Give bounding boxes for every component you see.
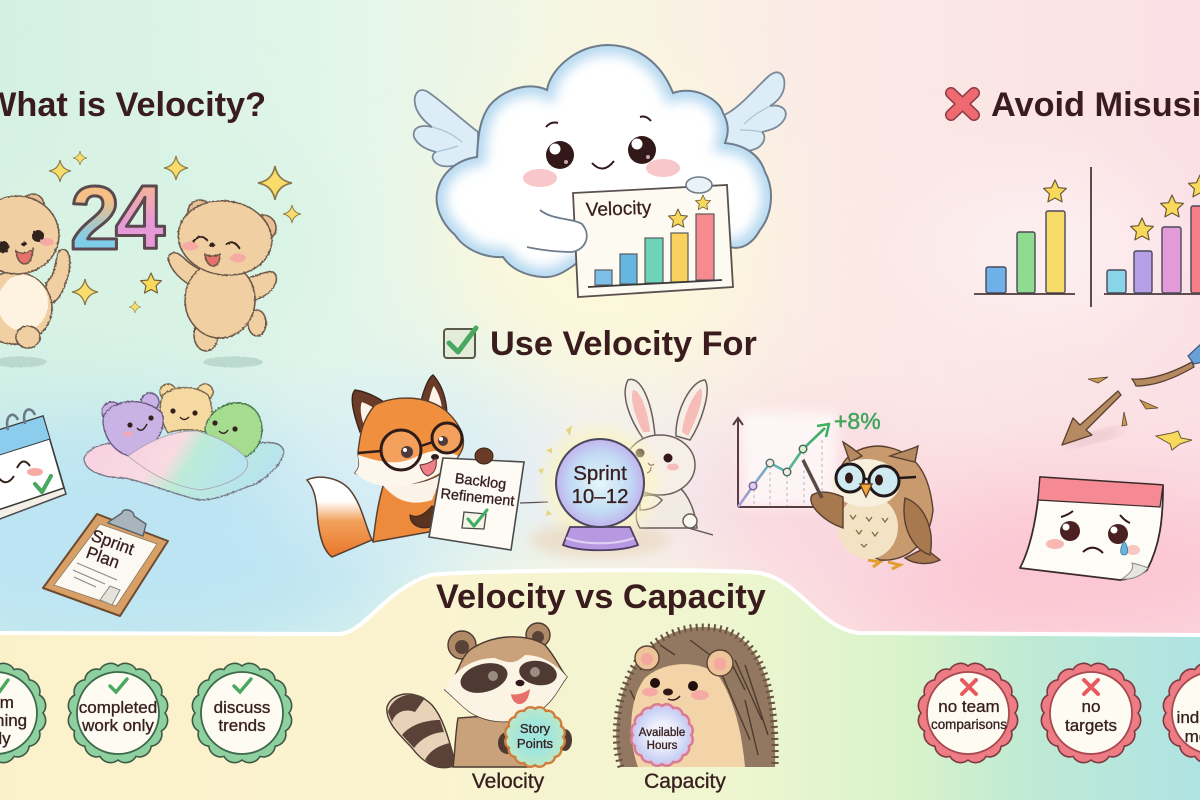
sticker: no team comparisons — [918, 663, 1018, 763]
illustration: sprint plan clipboard: Plan — [84, 543, 122, 572]
fox body — [373, 480, 440, 542]
backlog refinement sheet: Refinement — [440, 486, 515, 510]
number: 24 story points — [70, 168, 165, 269]
sticker: discuss trends: trends — [218, 716, 266, 735]
heading: Velocity vs Capacity: Velocity vs Capacity — [436, 578, 766, 616]
cloud body — [437, 45, 771, 277]
sticker: completed work only — [68, 663, 168, 763]
velocity chart card — [573, 185, 733, 297]
yellow plush — [160, 384, 213, 433]
illustration: owl with pointer — [803, 442, 940, 569]
left team bars — [986, 211, 1065, 293]
sticker: completed work only: work only — [81, 716, 154, 735]
right wing — [724, 72, 786, 152]
hedgehog spines — [616, 627, 775, 767]
label: Velocity: Velocity — [472, 770, 545, 793]
badge: available hours: Available — [639, 727, 685, 739]
fox head — [355, 398, 463, 485]
sparkles around the number — [49, 151, 301, 313]
badge: story points — [505, 707, 565, 767]
sticker: no team comparisons: no team — [938, 697, 1000, 716]
right team bars — [1107, 206, 1200, 293]
illustration: sprint plan clipboard: Sprint — [89, 526, 137, 559]
left wing — [414, 90, 478, 166]
quilt — [84, 437, 284, 500]
mascot: winged cloud with velocity chart — [414, 45, 786, 297]
illustration: crystal ball sprint 10-12 — [534, 417, 666, 550]
illustration: bunny — [625, 379, 707, 528]
hedgehog face — [631, 664, 745, 767]
illustration: fox holding backlog refinement sheet — [307, 375, 524, 557]
illustration: sprint plan clipboard — [43, 510, 168, 616]
sticker: discuss trends: discuss — [214, 698, 270, 717]
raccoon hands — [498, 732, 516, 754]
cloud arms — [527, 177, 712, 252]
number: 24 story points: 4 — [115, 168, 165, 268]
icon: red cross — [951, 93, 974, 115]
illustration: celebrating right bear — [168, 195, 277, 368]
badge: story points: Story — [520, 721, 551, 736]
cloud face — [523, 116, 680, 187]
raccoon tail — [387, 694, 456, 768]
label: Capacity: Capacity — [644, 770, 726, 793]
raccoon ears — [448, 631, 476, 659]
backlog refinement sheet — [429, 458, 524, 550]
illustration: broken arrow — [1062, 342, 1200, 450]
illustration: happy calendar — [0, 409, 66, 522]
raccoon body — [453, 715, 535, 767]
sticker: no team comparisons: comparisons — [931, 717, 1007, 732]
backlog refinement sheet: Backlog — [454, 471, 507, 493]
sticker: team planning only — [0, 663, 46, 763]
illustration: sad calendar — [1020, 477, 1163, 580]
badge: story points: Points — [517, 736, 554, 751]
illustration: crystal ball sprint 10-12: 10–12 — [571, 485, 629, 508]
bar charts: comparison of teams — [974, 167, 1200, 307]
sticker: discuss trends — [192, 663, 292, 763]
sticker: completed work only: completed — [79, 698, 157, 717]
illustration: raccoon with story points — [387, 623, 572, 768]
sticker: individual metrics — [1163, 663, 1200, 763]
blanket over the plush — [128, 431, 248, 490]
sticker: no targets: no — [1082, 697, 1100, 716]
badge: available hours: Hours — [647, 740, 678, 752]
raccoon head — [445, 637, 567, 722]
table edge under fox and bunny — [520, 502, 713, 558]
line chart: trend +8%: +8% — [834, 408, 881, 434]
illustration: celebrating left bear — [0, 194, 70, 368]
heading: Use Velocity For: Use Velocity For — [490, 325, 757, 363]
number: 24 story points: 2 — [70, 169, 120, 269]
velocity chart card: Velocity — [585, 198, 652, 221]
badge: available hours — [631, 704, 693, 766]
fox face and glasses — [358, 423, 462, 476]
illustration: plush toys on quilt — [84, 384, 284, 500]
green plush — [205, 403, 262, 458]
fox ears — [352, 390, 395, 432]
illustration: hedgehog with available hours — [616, 627, 775, 767]
illustration: crystal ball sprint 10-12: Sprint — [573, 462, 627, 485]
sticker: no targets: targets — [1065, 716, 1117, 735]
sticker: no targets — [1041, 663, 1141, 763]
fox tail — [307, 477, 372, 557]
purple plush — [102, 393, 163, 456]
bottom band — [0, 570, 1200, 800]
icon: green check box — [444, 328, 476, 358]
line chart: trend +8% — [733, 408, 881, 507]
